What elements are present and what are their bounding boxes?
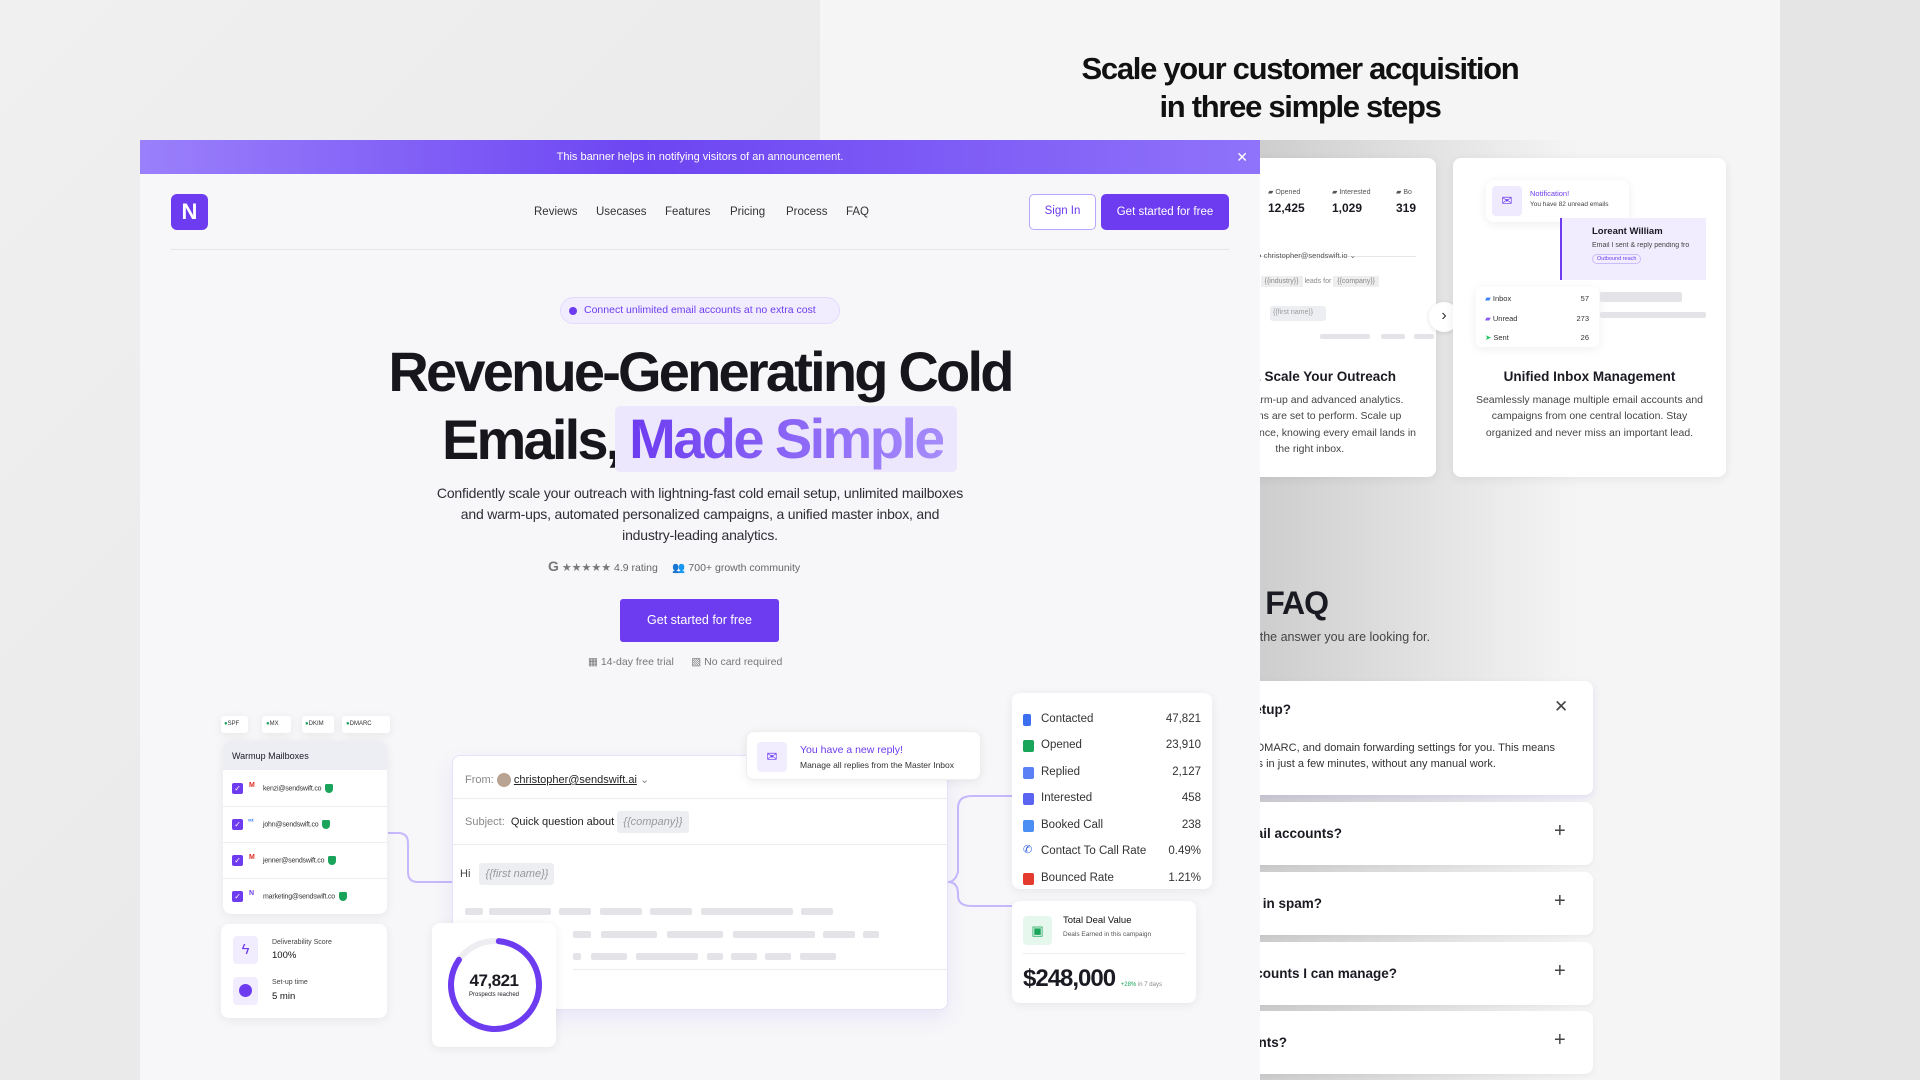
campaign stats panel: Bounced Rate (1041, 872, 1114, 884)
notification popup: Notification! (1530, 189, 1569, 198)
warmup mailboxes panel: M (249, 854, 255, 861)
background left panel (0, 0, 820, 1080)
inbox counts: 26 (1581, 333, 1589, 342)
arrow: next chevron (1429, 302, 1459, 332)
campaign stats panel: Contact To Call Rate (1041, 845, 1146, 857)
main landing page card: Reviews (534, 206, 577, 218)
header CTA button (1101, 194, 1229, 230)
campaign stats panel: 458 (1182, 792, 1201, 804)
warmup mailboxes panel: kenzi@sendswift.co (263, 785, 321, 792)
step heading: Unified Inbox Management (1504, 369, 1675, 384)
step text: with confidence, knowing every email lands in (1204, 427, 1416, 439)
main landing page card: Emails, (442, 408, 619, 471)
warmup mailboxes panel: ✓ (234, 892, 241, 901)
pill badge (560, 297, 840, 324)
warmup mailboxes panel: ✓ (234, 856, 241, 865)
step text: organized and never miss an important lead. (1486, 427, 1693, 439)
FAQ item 4 (1200, 942, 1593, 1005)
text: + (1554, 820, 1566, 842)
text: + (1554, 960, 1566, 982)
rating row: G ★★★★★ 4.9 rating 👥 700+ growth community (548, 558, 800, 574)
step text (1204, 394, 1416, 455)
inbox counts: ▰ Unread (1485, 314, 1517, 323)
deliverability panel (221, 924, 387, 1018)
deliverability panel: Set-up time (272, 979, 308, 986)
inbox counts: ▰ Inbox (1485, 294, 1511, 303)
total deal value panel: ▣ (1031, 923, 1044, 938)
text: How do I avoid landing in spam? (1112, 896, 1322, 911)
campaign stats panel: 23,910 (1166, 739, 1201, 751)
new reply notification: ✉ (767, 749, 777, 764)
notification popup: You have 82 unread emails (1530, 201, 1609, 208)
donut chart: prospects reached: 47,821 (470, 971, 518, 990)
section title: three simple steps: Scale your customer acquisition (1082, 51, 1518, 86)
warmup mailboxes panel: M (249, 782, 255, 789)
main landing page card: ●SPF (224, 721, 239, 727)
campaign stats panel (1012, 693, 1212, 889)
step card: unified inbox (1453, 158, 1726, 477)
warmup mailboxes panel: ✓ (234, 784, 241, 793)
highlighted phrase: Made Simple (629, 407, 943, 470)
text: We configure SPF, DKIM, DMARC, and domain forwarding settings for you. This means (1129, 742, 1555, 754)
FAQ item 3 (1200, 872, 1593, 935)
email composer: Hi {{first name}} (460, 868, 548, 880)
main landing page card: FAQ (846, 206, 869, 218)
step text: Smart warm-up and advanced analytics. (1216, 394, 1403, 406)
pill badge: Connect unlimited email accounts at no extra cost (584, 304, 816, 316)
main landing page card: ●MX (266, 721, 279, 727)
email composer: Subject: Quick question about {{company}} (465, 816, 683, 828)
email composer (452, 755, 948, 1010)
email composer: From: christopher@sendswift.ai ⌄ (465, 774, 649, 786)
subheading paragraph: Confidently scale your outreach with lightning-fast cold email setup, unlimited mailboxes (437, 485, 963, 501)
donut chart: prospects reached (432, 923, 556, 1047)
campaign stats panel: 47,821 (1166, 713, 1201, 725)
step card: scale your outreach: 12,425 (1268, 201, 1305, 215)
step card: scale your outreach: 1,029 (1332, 201, 1362, 215)
text: What's included in the setup? (1100, 702, 1291, 717)
subheading paragraph (437, 485, 963, 543)
navigation (534, 206, 869, 218)
main landing page card: ●DMARC (346, 721, 372, 727)
text: Is there a limit on accounts I can manage? (1125, 966, 1397, 981)
DNS badges (224, 720, 386, 735)
warmup mailboxes panel: john@sendswift.co (263, 821, 318, 828)
subheading paragraph: and warm-ups, automated personalized campaigns, a unified master inbox, and (461, 506, 939, 522)
step text: campaigns from one central location. Stay (1492, 410, 1687, 422)
section title: three simple steps (1082, 51, 1518, 124)
total deal value panel: Total Deal Value (1063, 915, 1131, 926)
FAQ heading: FAQ (1265, 585, 1328, 621)
shadow of main card (1260, 140, 1580, 1080)
message preview (1560, 218, 1706, 280)
step text: the right inbox. (1275, 443, 1344, 455)
arrow: next chevron: › (1441, 307, 1447, 324)
inbox counts: ➤ Sent (1485, 333, 1509, 342)
message preview: Loreant William (1592, 226, 1663, 237)
inbox counts (1476, 287, 1599, 347)
text: you can start sending from your accounts in just a few minutes, without any manual work. (1062, 758, 1496, 770)
warmup mailboxes panel: jenner@sendswift.co (263, 857, 324, 864)
new reply notification: You have a new reply! (800, 744, 903, 756)
step card: scale your outreach: ubject {{industry}} leads for {{company}} (1240, 278, 1375, 285)
stats strip: ▰ Opened (1268, 189, 1300, 196)
campaign stats panel: 0.49% (1168, 845, 1201, 857)
FAQ item 1 open (1200, 681, 1593, 795)
deliverability panel: 100% (272, 950, 296, 961)
campaign stats panel: Interested (1041, 792, 1092, 804)
campaign stats panel: Contacted (1041, 713, 1093, 725)
announcement banner (140, 140, 1260, 174)
connector lines (388, 795, 1012, 907)
campaign stats panel: Opened (1041, 739, 1082, 751)
step card: scale your outreach: rom: ● christopher@sendswift.io ⌄ (1240, 251, 1356, 260)
main landing page card: ●DKIM (305, 721, 324, 727)
notification popup: ✉ (1502, 193, 1512, 208)
main landing page card: Features (665, 206, 710, 218)
main CTA button (620, 599, 779, 642)
message preview: Outbound reach (1597, 256, 1636, 262)
total deal value panel (1012, 901, 1196, 1003)
campaign stats panel: 238 (1182, 819, 1201, 831)
warmup mailboxes panel: ᵒᵘᵗ (248, 819, 253, 825)
step text: campaigns are set to perform. Scale up (1218, 410, 1401, 422)
step card: scale your outreach: ▰ Interested (1332, 189, 1370, 196)
step card: scale your outreach: {{first name}} (1273, 309, 1313, 316)
deliverability panel: ϟ (242, 941, 249, 958)
main CTA button: Get started for free (647, 613, 752, 627)
logo: N (182, 199, 197, 224)
text: Can I connect my accounts? (1104, 1035, 1287, 1050)
warmup mailboxes panel: N (249, 890, 254, 897)
warmup mailboxes panel: marketing@sendswift.co (263, 893, 335, 900)
step card: scale your outreach: 319 (1396, 201, 1416, 215)
campaign stats panel: Replied (1041, 766, 1080, 778)
step text: Seamlessly manage multiple email accounts and (1476, 394, 1703, 406)
campaign stats panel: 2,127 (1172, 766, 1201, 778)
warmup mailboxes panel (223, 741, 387, 914)
inbox counts: 273 (1576, 314, 1589, 323)
message preview: Email I sent & reply pending fro (1592, 242, 1689, 249)
background far right strip (1780, 0, 1920, 1080)
sign in button (1029, 194, 1096, 230)
inbox counts: 57 (1581, 294, 1589, 303)
background right panel (820, 0, 1780, 1080)
trial notes: ▦ 14-day free trial ▧ No card required (588, 656, 782, 668)
FAQ subtitle: Can't find the answer you are looking for. (1204, 630, 1430, 644)
sign in button: Sign In (1045, 205, 1080, 217)
notification popup (1486, 180, 1629, 222)
total deal value panel: Deals Earned in this campaign (1063, 931, 1151, 938)
warmup mailboxes panel: ✓ (234, 820, 241, 829)
text: How many email accounts? (1165, 826, 1342, 841)
main landing page card: Pricing (730, 206, 765, 218)
FAQ item 5 (1200, 1011, 1593, 1074)
announcement banner: This banner helps in notifying visitors of an announcement. (557, 151, 843, 163)
total deal value panel: $248,000 +28% in 7 days (1023, 965, 1162, 992)
logo (171, 194, 208, 230)
step card: scale your outreach: ▰ Bo (1396, 189, 1412, 196)
text: + (1554, 890, 1566, 912)
deliverability panel: Deliverability Score (272, 939, 332, 946)
main landing page card: Usecases (596, 206, 646, 218)
subheading paragraph: industry-leading analytics. (622, 527, 778, 543)
FAQ item 2 (1200, 802, 1593, 865)
header CTA button: Get started for free (1117, 206, 1213, 218)
text: ✕ (1554, 697, 1568, 716)
new reply notification (746, 731, 981, 780)
new reply notification: Manage all replies from the Master Inbox (800, 760, 954, 770)
campaign stats panel: Booked Call (1041, 819, 1103, 831)
step card: scale your outreach (1100, 158, 1436, 477)
warmup mailboxes panel: Warmup Mailboxes (232, 751, 309, 761)
headline: Revenue-Generating Cold (388, 340, 1012, 403)
announcement banner: ✕ (1236, 149, 1248, 165)
main landing page card (140, 140, 1260, 1080)
step heading: Warm Up & Scale Your Outreach (1188, 369, 1396, 384)
campaign stats panel: 1.21% (1168, 872, 1201, 884)
main landing page card: Process (786, 206, 828, 218)
campaign stats panel: ✆ (1023, 844, 1032, 856)
deliverability panel: 5 min (272, 991, 295, 1002)
step text (1476, 394, 1703, 439)
section title: three simple steps: in three simple steps (1159, 89, 1441, 124)
text: + (1554, 1029, 1566, 1051)
donut chart: prospects reached: Prospects reached (469, 992, 519, 998)
